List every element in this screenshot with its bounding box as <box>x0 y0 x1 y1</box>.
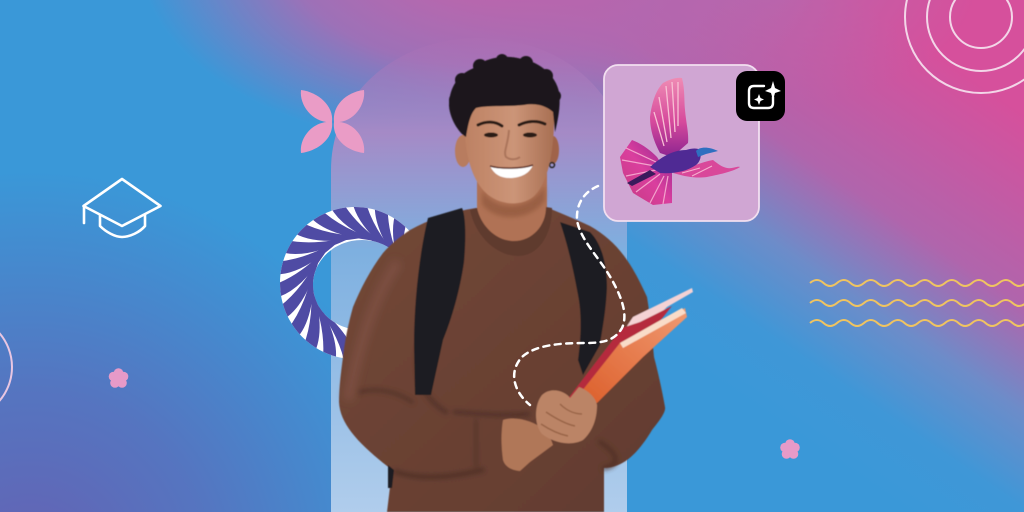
face <box>465 96 554 203</box>
earring <box>550 162 554 168</box>
backpack strap right <box>560 222 607 375</box>
book cover orange <box>578 308 687 403</box>
wavy lines <box>810 280 1024 326</box>
partial circle left edge <box>0 315 12 419</box>
knuckle lines <box>541 404 582 436</box>
sleeve shading <box>360 345 616 477</box>
book page edge <box>620 308 686 348</box>
bird head <box>696 148 718 157</box>
nose shadow <box>505 130 520 159</box>
bird lower wing <box>673 160 740 178</box>
bird tail <box>620 140 672 205</box>
hand lower <box>502 418 553 471</box>
icon: concentric circles <box>905 0 1024 93</box>
icon: small flower left <box>109 368 128 388</box>
hand upper <box>536 387 597 443</box>
smile <box>490 165 533 178</box>
neck <box>477 160 547 243</box>
student <box>339 54 693 512</box>
icon: image sparkle <box>749 81 781 108</box>
brows <box>478 121 545 126</box>
neck shadow <box>482 185 545 217</box>
wing lower lines <box>682 166 712 176</box>
wing feather lines <box>654 82 678 146</box>
sleeve highlight <box>348 262 398 400</box>
image card with bird <box>604 65 759 221</box>
bird upper wing <box>650 78 688 157</box>
left side strap below arm <box>388 465 394 488</box>
icon badge <box>736 71 785 121</box>
eyes <box>484 132 537 138</box>
sweatshirt collar <box>470 207 552 256</box>
icon: four petal flower <box>301 90 364 153</box>
bird body <box>650 148 701 173</box>
ear left <box>455 135 471 167</box>
book cover dark <box>567 306 672 400</box>
smile outline <box>490 165 533 168</box>
tail feather lines <box>622 148 668 204</box>
dashed connector <box>514 186 624 405</box>
backpack strap left <box>414 208 465 395</box>
dark tail stripe <box>627 170 656 186</box>
striped ring <box>280 207 410 358</box>
hair <box>449 54 561 137</box>
icon: small flower right <box>780 439 800 459</box>
sweatshirt body <box>339 207 665 512</box>
book pages top <box>627 288 693 340</box>
arch panel behind student <box>331 38 627 512</box>
card background <box>604 65 759 221</box>
icon: graduation cap <box>84 179 160 237</box>
ear right <box>547 136 559 164</box>
